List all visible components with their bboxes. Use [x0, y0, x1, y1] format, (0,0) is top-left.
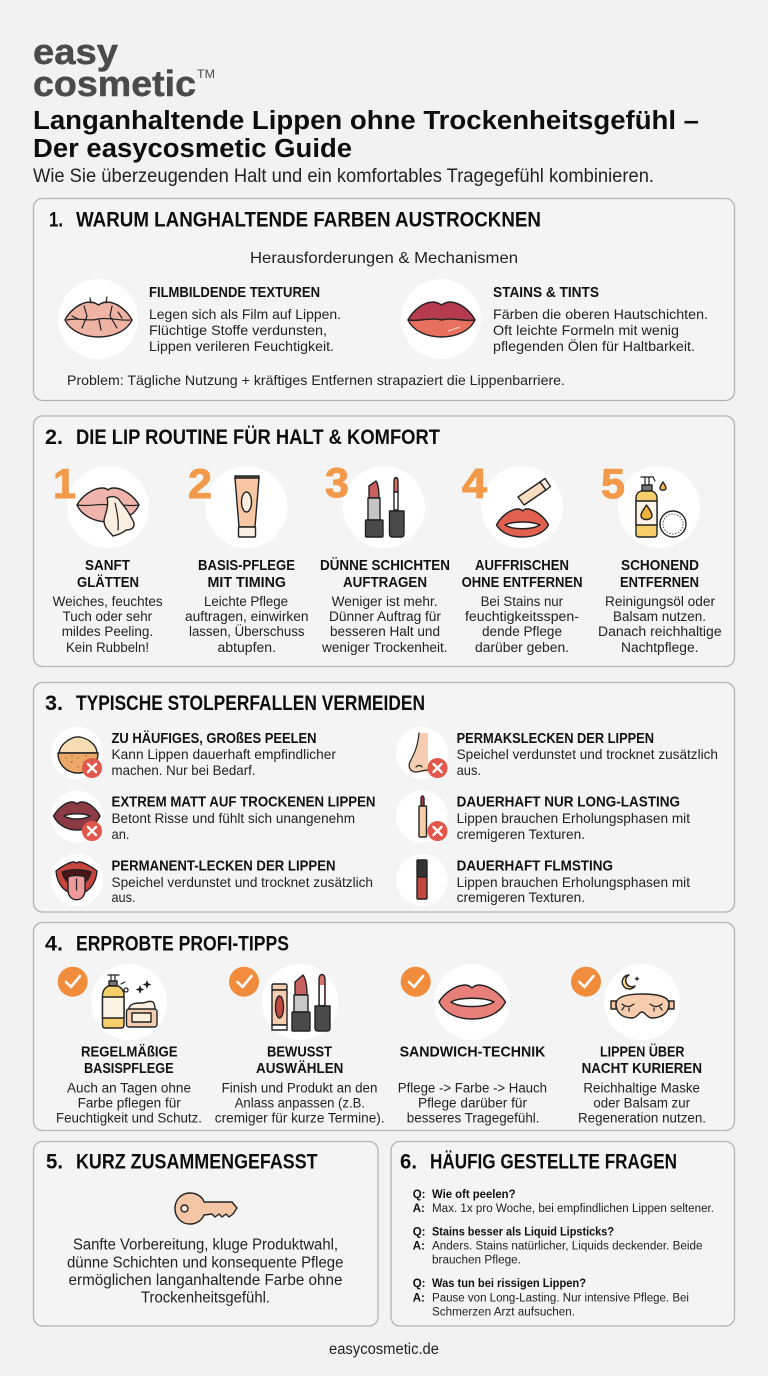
panel: stolperfallen — [34, 682, 734, 912]
text block: stains und tints — [493, 284, 708, 354]
pitfall: peeling: machen. Nur bei Bedarf. — [112, 762, 256, 778]
problem note: Problem: Tägliche Nutzung + kräftiges Entfernen strapaziert die Lippenbarriere. — [67, 372, 565, 388]
step 5: Nachtpflege. — [621, 640, 698, 655]
step 1: 1 — [53, 460, 76, 507]
step 1: mildes Peeling. — [62, 624, 153, 639]
pitfall: nase: Speichel verdunstet und trocknet zusätzlich — [457, 746, 718, 762]
step 1: Tuch oder sehr — [63, 609, 153, 624]
tip 3: Pflege darüber für — [418, 1096, 527, 1111]
heading 3: TYPISCHE STOLPERFALLEN VERMEIDEN — [76, 692, 425, 715]
panel: häufig gestellte Fragen — [391, 1142, 734, 1326]
step 5: Reinigungsöl oder — [605, 594, 716, 609]
tip 4: oder Balsam zur — [593, 1096, 690, 1111]
icon: stained lips — [401, 279, 481, 359]
step 3: weniger Trockenheit. — [321, 640, 448, 655]
step 2: 2 — [188, 460, 212, 507]
pitfall: liquid lipstick — [396, 854, 690, 906]
faq 2: A: — [413, 1241, 425, 1253]
subheading: Herausforderungen & Mechanismen — [250, 250, 518, 267]
panel: lip routine — [34, 416, 734, 666]
pitfall: extrem matt: an. — [112, 826, 130, 842]
faq 1 — [413, 1189, 714, 1215]
pitfall: peeling — [51, 727, 336, 779]
faq 3: Q: — [413, 1278, 425, 1290]
faq 3: Was tun bei rissigen Lippen? — [432, 1278, 586, 1290]
tip 4 — [571, 964, 706, 1126]
heading 1: WARUM LANGHALTENDE FARBEN AUSTROCKNEN — [76, 208, 541, 232]
text block: filmbildende Texturen: Flüchtige Stoffe verdunsten, — [149, 322, 327, 338]
pitfall: long-lasting stift — [396, 790, 690, 842]
step 2: lassen, Überschuss — [189, 624, 305, 639]
faq 3: A: — [413, 1292, 425, 1304]
tip 2: cremiger für kurze Termine). — [215, 1111, 385, 1126]
pitfall: extrem matt: EXTREM MATT AUF TROCKENEN LIPPEN — [112, 794, 376, 811]
tip 2 — [215, 964, 385, 1126]
tip 3: Pflege -> Farbe -> Hauch — [398, 1080, 547, 1095]
tip 3 — [398, 964, 547, 1126]
pitfall: long-lasting stift: Lippen brauchen Erholungsphasen mit — [457, 810, 690, 826]
step 4: dende Pflege — [482, 624, 562, 639]
tip 3: SANDWICH-TECHNIK — [400, 1044, 546, 1061]
step 1: GLÄTTEN — [77, 574, 139, 591]
pitfall: peeling: ZU HÄUFIGES, GROßES PEELEN — [112, 730, 316, 747]
step 2: BASIS-PFLEGE — [198, 557, 295, 574]
pitfall: peeling: Kann Lippen dauerhaft empfindlicher — [112, 746, 336, 762]
pitfall: liquid lipstick: Lippen brauchen Erholungsphasen mit — [457, 874, 690, 890]
tip 1: Farbe pflegen für — [78, 1096, 181, 1111]
heading 5: KURZ ZUSAMMENGEFASST — [76, 1151, 318, 1174]
pitfall: lecken: Speichel verdunstet und trocknet zusätzlich — [112, 874, 373, 890]
step 5: ENTFERNEN — [620, 574, 699, 591]
pitfall: extrem matt: Betont Risse und fühlt sich unangenehm — [112, 810, 355, 826]
pitfall: extrem matt — [51, 790, 376, 842]
pitfall: nase: aus. — [457, 762, 481, 778]
step 2: abtupfen. — [218, 640, 276, 655]
heading 6: 6. — [400, 1151, 417, 1174]
summary text: Trockenheitsgefühl. — [141, 1290, 270, 1307]
tip 4: LIPPEN ÜBER — [600, 1044, 685, 1061]
panel: profi-tipps — [34, 922, 734, 1130]
text block: stains und tints: Färben die oberen Hautschichten. — [493, 306, 708, 322]
summary text: Sanfte Vorbereitung, kluge Produktwahl, — [73, 1237, 338, 1254]
step 5: Danach reichhaltige — [598, 624, 722, 639]
logo: TM — [197, 69, 215, 81]
faq 3 — [413, 1278, 689, 1318]
footer: easycosmetic.de — [329, 1341, 439, 1358]
text block: filmbildende Texturen: Lippen verileren Feuchtigkeit. — [149, 338, 334, 354]
heading 1: 1. — [49, 208, 63, 232]
pitfall: lecken — [51, 854, 373, 906]
step 3: 3 — [325, 459, 349, 506]
step 2: Leichte Pflege — [204, 594, 288, 609]
logo — [33, 31, 215, 104]
faq 2 — [413, 1226, 702, 1267]
faq 3: Schmerzen Arzt aufsuchen. — [432, 1306, 575, 1318]
tip 1: Auch an Tagen ohne — [67, 1080, 191, 1095]
tip 4: Reichhaltige Maske — [583, 1080, 700, 1095]
heading 2: DIE LIP ROUTINE FÜR HALT & KOMFORT — [76, 426, 440, 449]
step 3: Weniger ist mehr. — [332, 594, 438, 609]
tip 4: NACHT KURIEREN — [582, 1060, 702, 1077]
step 3: DÜNNE SCHICHTEN — [320, 557, 450, 574]
heading 2: 2. — [45, 426, 63, 449]
step 4: AUFFRISCHEN — [475, 557, 569, 574]
pitfall: long-lasting stift: cremigeren Texturen. — [457, 826, 585, 842]
pitfall: nase: PERMAKSLECKEN DER LIPPEN — [457, 730, 654, 747]
step 4 — [462, 460, 583, 655]
step 1: Weiches, feuchtes — [53, 594, 163, 609]
logo: cosmetic — [33, 63, 196, 104]
step 5 — [598, 460, 722, 655]
step 3 — [320, 459, 450, 655]
step 2: MIT TIMING — [208, 574, 286, 591]
faq 3: Pause von Long-Lasting. Nur intensive Pflege. Bei — [432, 1292, 689, 1304]
step 3: Dünner Auftrag für — [329, 609, 441, 624]
step 4: Bei Stains nur — [481, 594, 564, 609]
pitfall: liquid lipstick: cremigeren Texturen. — [457, 889, 585, 905]
step 1 — [53, 460, 163, 655]
faq 2: Q: — [413, 1226, 425, 1238]
icon: cracked lips — [58, 279, 138, 359]
title: Der easycosmetic Guide — [33, 135, 352, 163]
tip 1: Feuchtigkeit und Schutz. — [56, 1111, 202, 1126]
step 2: auftragen, einwirken — [185, 609, 308, 624]
logo: easy — [33, 31, 118, 72]
step 3: AUFTRAGEN — [343, 574, 427, 591]
summary text — [67, 1237, 343, 1307]
panel: kurz zusammengefasst — [34, 1142, 378, 1326]
tip 2: Finish und Produkt an den — [222, 1080, 377, 1095]
pitfall: lecken: aus. — [112, 889, 136, 905]
step 4: OHNE ENTFERNEN — [462, 574, 583, 591]
heading 4: ERPROBTE PROFI-TIPPS — [76, 933, 289, 956]
step 5: Balsam nutzen. — [613, 609, 706, 624]
step 3: besseren Halt und — [330, 624, 440, 639]
faq 2: brauchen Pflege. — [432, 1255, 521, 1267]
tip 2: BEWUSST — [267, 1044, 332, 1061]
title: Langanhaltende Lippen ohne Trockenheitsgefühl – — [33, 107, 699, 135]
summary text: ermöglichen langanhaltende Farbe ohne — [68, 1272, 342, 1289]
tip 2: Anlass anpassen (z.B. — [235, 1096, 365, 1111]
faq 1: Q: — [413, 1189, 425, 1201]
step 4: darüber geben. — [475, 640, 569, 655]
pitfall: liquid lipstick: DAUERHAFT FLMSTING — [457, 858, 613, 875]
text block: stains und tints: pflegenden Ölen für Haltbarkeit. — [493, 337, 695, 354]
step 4: 4 — [462, 460, 488, 507]
step 5: 5 — [601, 460, 625, 507]
tip 3: besseres Tragegefühl. — [407, 1111, 540, 1126]
step 1: SANFT — [85, 557, 130, 574]
pitfall: nase — [396, 727, 718, 779]
step 5: SCHONEND — [621, 557, 699, 574]
tip 1: REGELMÄßIGE — [81, 1044, 178, 1061]
pitfall: lecken: PERMANENT-LECKEN DER LIPPEN — [112, 858, 336, 875]
faq 2: Stains besser als Liquid Lipsticks? — [432, 1226, 614, 1238]
heading 5: 5. — [46, 1151, 63, 1174]
heading 4: 4. — [45, 933, 63, 956]
heading 3: 3. — [45, 692, 63, 715]
faq 1: Wie oft peelen? — [432, 1189, 516, 1201]
text block: filmbildende Texturen — [149, 284, 341, 354]
summary text: dünne Schichten und konsequente Pflege — [67, 1254, 343, 1271]
panel: warum langhaltende Farben austrocknen — [34, 198, 734, 400]
text block: filmbildende Texturen: Legen sich als Film auf Lippen. — [149, 306, 341, 322]
text block: stains und tints: STAINS & TINTS — [493, 284, 599, 301]
faq 2: Anders. Stains natürlicher, Liquids deckender. Beide — [432, 1241, 702, 1253]
pitfall: long-lasting stift: DAUERHAFT NUR LONG-LASTING — [457, 794, 680, 811]
faq 1: A: — [413, 1203, 425, 1215]
step 4: feuchtigkeitsspen- — [465, 609, 579, 624]
tip 1: BASISPFLEGE — [84, 1060, 174, 1077]
step 2 — [185, 460, 308, 655]
icon: key — [175, 1193, 237, 1224]
step 1: Kein Rubbeln! — [66, 640, 149, 655]
tip 2: AUSWÄHLEN — [256, 1060, 343, 1077]
subtitle: Wie Sie überzeugenden Halt und ein komfortables Tragegefühl kombinieren. — [33, 166, 654, 187]
text block: filmbildende Texturen: FILMBILDENDE TEXTUREN — [149, 284, 320, 301]
tip 4: Regeneration nutzen. — [578, 1111, 706, 1126]
heading 6: HÄUFIG GESTELLTE FRAGEN — [430, 1151, 677, 1174]
tip 1 — [56, 964, 202, 1126]
text block: stains und tints: Oft leichte Formeln mit wenig — [493, 322, 679, 338]
title — [33, 107, 699, 163]
faq 1: Max. 1x pro Woche, bei empfindlichen Lippen seltener. — [432, 1203, 714, 1215]
